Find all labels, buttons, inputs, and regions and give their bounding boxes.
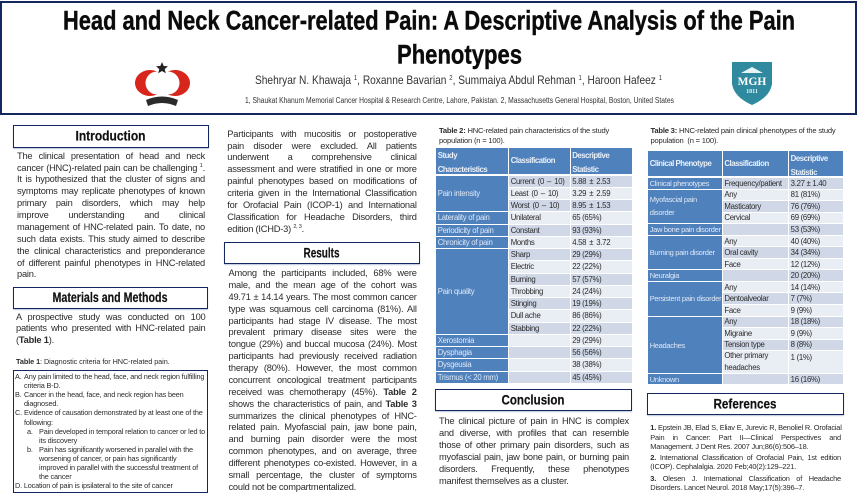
table 3: clinical phenotypes: Dentoalveolar bbox=[724, 294, 769, 303]
table 3: clinical phenotypes: 7 (7%) bbox=[791, 294, 812, 303]
text: results body: summarizes the clinical phenotypes of HNC- bbox=[228, 410, 417, 420]
panel: introduction bbox=[12, 125, 210, 279]
table 3: clinical phenotypes: Cervical bbox=[724, 213, 750, 222]
table 2: pain characteristics: Pain quality bbox=[438, 287, 474, 296]
header banner bbox=[0, 1, 857, 115]
text: results body: therapy (80%). However, the most common bbox=[228, 363, 417, 373]
table 3: clinical phenotypes: 8 (8%) bbox=[791, 340, 812, 349]
table 2: pain characteristics: 8.95 ± 1.53 bbox=[572, 201, 610, 210]
table 3: clinical phenotypes: 12 (12%) bbox=[791, 260, 820, 269]
table 2: pain characteristics: Dull ache bbox=[511, 311, 540, 320]
table 1 criteria box: Cancer in the head, face, and neck region has been bbox=[24, 390, 184, 399]
text: conclusion body: manifest themselves as a cluster. bbox=[439, 476, 569, 486]
table 3: clinical phenotypes: 40 (40%) bbox=[791, 236, 820, 246]
table 1 criteria box: Pain has significantly worsened in parallel with the bbox=[39, 445, 193, 454]
text: introduction body bbox=[17, 151, 206, 279]
table 1 criteria box: its discovery bbox=[39, 436, 77, 445]
table 2: pain characteristics: 4.58 ± 3.72 bbox=[572, 238, 610, 247]
text: introduction body: of different painful phenotypes in HNC-related bbox=[17, 258, 205, 268]
text: results body: tongue (29%) and buccal mucosa (24%). Most bbox=[228, 339, 417, 349]
table 3: clinical phenotypes: disorder bbox=[650, 208, 674, 217]
text: reference 1: 1. Epstein JB, Elad S, Eliav E, Jurevic R, Benoliel R. Orofacial bbox=[650, 423, 842, 432]
table 3: clinical phenotypes bbox=[648, 151, 843, 385]
table 3: clinical phenotypes: Tension type bbox=[724, 340, 765, 349]
table 2: pain characteristics: Trismus (< 20 mm) bbox=[438, 373, 498, 382]
title bbox=[63, 5, 795, 70]
table 2: pain characteristics: 3.29 ± 2.59 bbox=[572, 189, 610, 198]
authors: , Summaiya Abdul Rehman bbox=[453, 73, 579, 87]
table 3: clinical phenotypes: 14 (14%) bbox=[791, 283, 820, 292]
table 2: pain characteristics: Pain intensity bbox=[438, 189, 480, 198]
text: introduction body: The clinical presentation of head and neck bbox=[17, 151, 205, 161]
table 2: pain characteristics bbox=[436, 148, 632, 384]
text: methods continued: Classification for Headache Disorders, third bbox=[227, 212, 417, 222]
table 3: clinical phenotypes: 3.27 ± 1.40 bbox=[791, 179, 826, 188]
text: results body: concurrent oncological treatment participants bbox=[228, 375, 417, 385]
table 1 criteria box: improved in parallel with the successful treatment of bbox=[39, 463, 198, 472]
text: methods continued: criteria given in the International Classification bbox=[227, 188, 417, 198]
table 3 caption bbox=[650, 126, 836, 145]
text: introduction body: the clinical characteristics and preponderance bbox=[17, 246, 205, 256]
table 2: pain characteristics: Dysphagia bbox=[438, 348, 472, 357]
table 3: clinical phenotypes: Any bbox=[724, 317, 737, 326]
table 2: pain characteristics: 56 (56%) bbox=[572, 348, 601, 357]
text: results body: could not be compartmentalized. bbox=[228, 482, 356, 492]
table 2: pain characteristics: 24 (24%) bbox=[572, 287, 601, 296]
table 1 criteria box: criteria B-D. bbox=[24, 381, 60, 390]
text: reference 3 line 2: Disorders. Lancet Neurol. 2018 May;17(5):396–7. bbox=[650, 483, 804, 492]
text: results body: common phenotypes, and on average, three bbox=[228, 446, 417, 456]
authors bbox=[255, 73, 662, 87]
authors: , Roxanne Bavarian bbox=[357, 73, 449, 87]
table 3: clinical phenotypes: 20 (20%) bbox=[791, 271, 820, 280]
text: results body: 49.71 ± 14.14 years. The most common cancer bbox=[228, 292, 417, 302]
text: methods continued: for Orofacial Pain (ICOP-1) and International bbox=[227, 200, 417, 210]
table 1 criteria box: following: bbox=[24, 418, 53, 427]
text: methods body bbox=[16, 312, 206, 345]
table 2: pain characteristics: 5.88 ± 2.53 bbox=[572, 177, 610, 186]
text: introduction body: such data exists. This study aimed to describe bbox=[17, 234, 205, 244]
text: results body: male, and the mean age of the cohort was bbox=[228, 280, 417, 290]
text: conclusion body: The clinical picture of pain in HNC is complex bbox=[439, 416, 629, 426]
text: conclusion body: and diverse, with profiles that can resemble bbox=[439, 428, 629, 438]
table 3: clinical phenotypes: headaches bbox=[724, 363, 760, 372]
table 2: pain characteristics: Least (0 – 10) bbox=[511, 189, 558, 198]
text: methods continued: pain disoder were excluded. All patients bbox=[227, 141, 417, 151]
authors: 1 bbox=[659, 75, 662, 82]
text: methods continued: Participants with mucositis or postoperative bbox=[227, 129, 417, 139]
table 3: clinical phenotypes: Oral cavity bbox=[724, 248, 758, 257]
heading: introduction: Introduction bbox=[76, 128, 146, 144]
text: reference 1 line 3: Management. J Dent Res. 2007 Jun;86(6):506–18. bbox=[650, 442, 808, 451]
text: conclusion body: those of other primary pain disorders, such as bbox=[439, 440, 629, 450]
table 3: clinical phenotypes: Descriptive bbox=[791, 154, 828, 163]
text: results body: participants had stage IV disease. The most bbox=[228, 316, 417, 326]
table 1 criteria box: the cancer bbox=[39, 472, 71, 481]
table 2: pain characteristics: Sharp bbox=[511, 250, 530, 259]
table 2: pain characteristics: Burning bbox=[511, 275, 535, 284]
text: reference 2: 2. International Classification of Orofacial Pain, 1st edition bbox=[650, 453, 841, 462]
table 2: pain characteristics: Characteristics bbox=[438, 165, 487, 174]
table 2: pain characteristics: Worst (0 – 10) bbox=[511, 201, 559, 210]
table 3: clinical phenotypes: Any bbox=[724, 283, 737, 292]
heading: references bbox=[647, 393, 844, 415]
text: reference 3: 3. Olesen J. International Classification of Headache bbox=[650, 474, 841, 483]
table 3 caption: Table 3: HNC-related pain clinical phenotypes of the study bbox=[650, 126, 835, 135]
text: methods continued: underwent a comprehensive clinical bbox=[227, 152, 417, 162]
panel: conclusion bbox=[434, 389, 632, 486]
table 3: clinical phenotypes: Frequency/patient bbox=[724, 179, 782, 188]
text: conclusion body bbox=[439, 416, 629, 486]
table 3: clinical phenotypes: Myofascial pain bbox=[650, 195, 697, 204]
panel: references bbox=[646, 393, 844, 492]
table 2: pain characteristics: Stinging bbox=[511, 299, 536, 308]
table 3: clinical phenotypes: Any bbox=[724, 236, 737, 246]
heading: materials and methods bbox=[13, 287, 208, 309]
table 2 caption: population (n = 100). bbox=[439, 136, 505, 145]
authors: 2 bbox=[449, 75, 453, 82]
text: methods body: (Table 1). bbox=[16, 335, 54, 345]
heading: conclusion bbox=[435, 389, 632, 411]
text: introduction body: primary pain disorders, which may help bbox=[17, 198, 205, 208]
table 2 caption bbox=[439, 126, 610, 145]
table 2: pain characteristics: 86 (86%) bbox=[572, 311, 601, 320]
table 1 criteria box bbox=[13, 370, 208, 493]
table 2: pain characteristics: Statistic bbox=[572, 165, 598, 174]
table 1 criteria box: D. Location of pain is ipsilateral to the site of cancer bbox=[15, 481, 173, 490]
table 3: clinical phenotypes: 53 (53%) bbox=[791, 225, 820, 234]
table 3: clinical phenotypes: Unknown bbox=[650, 375, 679, 384]
title: Phenotypes bbox=[397, 40, 522, 70]
text: methods body: patients who presented with HNC-related pain bbox=[16, 323, 206, 333]
table 3: clinical phenotypes: Clinical phenotypes bbox=[650, 179, 709, 188]
table 3: clinical phenotypes: Masticatory bbox=[724, 202, 761, 211]
icon: MGH shield logo: 1811 bbox=[746, 89, 758, 95]
text: introduction body: management of HNC-related pain. To date, no bbox=[17, 222, 205, 232]
table 3: clinical phenotypes: 9 (9%) bbox=[791, 306, 812, 315]
table 1 criteria box: diagnosed. bbox=[24, 399, 58, 408]
table 2: pain characteristics: Constant bbox=[511, 226, 540, 235]
table 3: clinical phenotypes: Headaches bbox=[650, 341, 685, 350]
table 1 criteria box: C. bbox=[15, 408, 22, 417]
text: results body: Among the participants included, 68% were bbox=[228, 268, 417, 278]
table 2: pain characteristics: Periodicity of pain bbox=[438, 226, 494, 235]
table 2: pain characteristics: Laterality of pain bbox=[438, 213, 490, 222]
table 2: pain characteristics: Classification bbox=[511, 156, 555, 165]
table 3: clinical phenotypes: Burning pain disorder bbox=[650, 248, 715, 257]
table 1 criteria box: Any pain limited to the head, face, and neck region fulfilling bbox=[24, 372, 204, 381]
text: results body: participants had previously received radiation bbox=[228, 351, 417, 361]
table 2: pain characteristics: Chronicity of pain bbox=[438, 238, 493, 247]
table 3: clinical phenotypes: Classification bbox=[724, 159, 769, 168]
text: introduction body: It is hypothesized that the cluster of signs and bbox=[17, 174, 205, 184]
text: reference 1 line 2: Pain in Cancer: Part II—Clinical Perspectives and bbox=[650, 433, 841, 442]
text: methods continued: assessment and were stratified in one or more bbox=[227, 164, 417, 174]
icon: MGH shield logo bbox=[732, 62, 772, 105]
text: results body: prevalent primary disease sites were the bbox=[228, 327, 417, 337]
table 3: clinical phenotypes: Statistic bbox=[791, 168, 817, 177]
panel: materials and methods bbox=[12, 287, 208, 493]
authors: Shehryar N. Khawaja bbox=[255, 73, 368, 87]
heading: materials and methods: Materials and Methods bbox=[52, 290, 168, 305]
text: methods continued: painful phenotypes based on modifications of bbox=[227, 176, 417, 186]
table 3: clinical phenotypes: 76 (76%) bbox=[791, 202, 820, 211]
table 3: clinical phenotypes: Any bbox=[724, 190, 737, 199]
table 2: pain characteristics: Months bbox=[511, 238, 534, 247]
heading: references: References bbox=[714, 396, 776, 412]
table 1 criteria box: Evidence of causation demonstrated by at least one of the bbox=[24, 408, 203, 417]
table 2: pain characteristics: 45 (45%) bbox=[572, 373, 601, 382]
text: results body: different phenotypes co-existed. However, in a bbox=[228, 458, 417, 468]
table 3: clinical phenotypes: Face bbox=[724, 260, 741, 269]
text: results body: and burning pain disorder were the most bbox=[228, 434, 417, 444]
panel: results bbox=[224, 242, 420, 492]
text: results body: related pain. Myofascial pain, jaw bone pain, bbox=[228, 422, 417, 432]
table 2: pain characteristics: Descriptive bbox=[572, 151, 609, 160]
text: introduction body: pain. bbox=[17, 269, 36, 279]
text: results body: received was chemotherapy (45%). Table 2 bbox=[228, 387, 417, 397]
table 2: pain characteristics: Current (0 – 10) bbox=[511, 177, 565, 186]
table 1 criteria box: worsening of cancer, or pain has significantly bbox=[39, 454, 176, 463]
table 3: clinical phenotypes: 34 (34%) bbox=[791, 248, 820, 257]
table 3: clinical phenotypes: 1 (1%) bbox=[791, 353, 812, 362]
text: introduction body: improve understanding and clinical bbox=[17, 210, 205, 220]
table 2: pain characteristics: 93 (93%) bbox=[572, 226, 601, 235]
table 2: pain characteristics: 22 (22%) bbox=[572, 262, 601, 271]
affiliations: 1, Shaukat Khanum Memorial Cancer Hospital & Research Centre, Lahore, Pakistan. 2, Massachusetts General Hospital, Boston, United States bbox=[245, 96, 674, 105]
table 2: pain characteristics: 29 (29%) bbox=[572, 336, 601, 345]
table 2: pain characteristics: 65 (65%) bbox=[572, 213, 601, 222]
table 3: clinical phenotypes: Migraine bbox=[724, 329, 752, 338]
table 2: pain characteristics: 19 (19%) bbox=[572, 299, 601, 308]
table 3: clinical phenotypes: Jaw bone pain disorder bbox=[650, 225, 721, 234]
text: methods continued: edition (ICHD-3) 2, 3. bbox=[227, 224, 304, 234]
table 3 caption: population (n = 100). bbox=[650, 136, 718, 145]
icon: MGH shield logo: MGH bbox=[738, 76, 766, 88]
table 3: clinical phenotypes: 9 (9%) bbox=[791, 329, 812, 338]
table 1 caption: Table 1: Diagnostic criteria for HNC-related pain. bbox=[16, 357, 170, 366]
table 2 caption: Table 2: HNC-related pain characteristics of the study bbox=[439, 126, 609, 135]
heading: introduction bbox=[13, 125, 209, 148]
table 2: pain characteristics: Unilateral bbox=[511, 213, 541, 222]
text: results body: shows the characteristics of pain, and Table 3 bbox=[228, 399, 417, 409]
authors: 1 bbox=[579, 75, 582, 82]
table 3: clinical phenotypes: Clinical Phenotype bbox=[650, 159, 711, 168]
table 2: pain characteristics: Throbbing bbox=[511, 287, 543, 296]
text: methods continued bbox=[227, 129, 417, 234]
text: results body: type was squamous cell carcinoma (81%). All bbox=[228, 304, 417, 314]
text: reference 2 line 2: (ICOP). Cephalalgia. 2020 Feb;40(2):129–221. bbox=[650, 462, 796, 471]
heading: results bbox=[224, 242, 420, 264]
table 1 criteria box: b. bbox=[27, 445, 33, 454]
table 3: clinical phenotypes: 18 (18%) bbox=[791, 317, 820, 326]
table 2: pain characteristics: Xerostomia bbox=[438, 336, 474, 345]
table 1 criteria box: Pain developed in temporal relation to cancer or led to bbox=[39, 427, 205, 436]
table 2: pain characteristics: Stabbing bbox=[511, 324, 539, 333]
table 3: clinical phenotypes: Persistent pain disorder bbox=[650, 294, 721, 303]
table 3: clinical phenotypes: Neuralgia bbox=[650, 271, 679, 280]
text: introduction body: symptoms may replicate phenotypes of known bbox=[17, 186, 205, 196]
authors: 1 bbox=[354, 75, 357, 82]
table 3: clinical phenotypes: 16 (16%) bbox=[791, 375, 820, 384]
table 2: pain characteristics: 29 (29%) bbox=[572, 250, 601, 259]
heading: results: Results bbox=[304, 245, 340, 260]
table 3: clinical phenotypes: Face bbox=[724, 306, 741, 315]
text: conclusion body: myofascial pain, jaw bone pain, or burning pain bbox=[439, 452, 629, 462]
table 1 criteria box: B. bbox=[15, 390, 22, 399]
table 2: pain characteristics: 38 (38%) bbox=[572, 360, 601, 369]
text: conclusion body: disorders. Frequently, these phenotypes bbox=[439, 464, 629, 474]
table 2: pain characteristics: Study bbox=[438, 151, 457, 160]
text: results body: small percentage, the cluster of symptoms bbox=[228, 470, 417, 480]
table 2: pain characteristics: Electric bbox=[511, 262, 534, 271]
table 2: pain characteristics: 22 (22%) bbox=[572, 324, 601, 333]
text: introduction body: cancer (HNC)-related pain can be challenging 1. bbox=[17, 162, 205, 173]
table 1 criteria box: A. bbox=[15, 372, 22, 381]
heading: conclusion: Conclusion bbox=[502, 392, 564, 408]
table 2: pain characteristics: Dysgeusia bbox=[438, 360, 471, 369]
title: Head and Neck Cancer-related Pain: A Descriptive Analysis of the Pain bbox=[63, 5, 795, 35]
authors: , Haroon Hafeez bbox=[582, 73, 659, 87]
icon: Shaukat Khanum logo bbox=[135, 62, 190, 106]
text: results body bbox=[228, 268, 417, 492]
table 1 criteria box: a. bbox=[27, 427, 33, 436]
table 3: clinical phenotypes: 69 (69%) bbox=[791, 213, 820, 222]
text: methods body: A prospective study was conducted on 100 bbox=[16, 312, 206, 322]
table 2: pain characteristics: 57 (57%) bbox=[572, 275, 601, 284]
table 3: clinical phenotypes: 81 (81%) bbox=[791, 190, 820, 199]
